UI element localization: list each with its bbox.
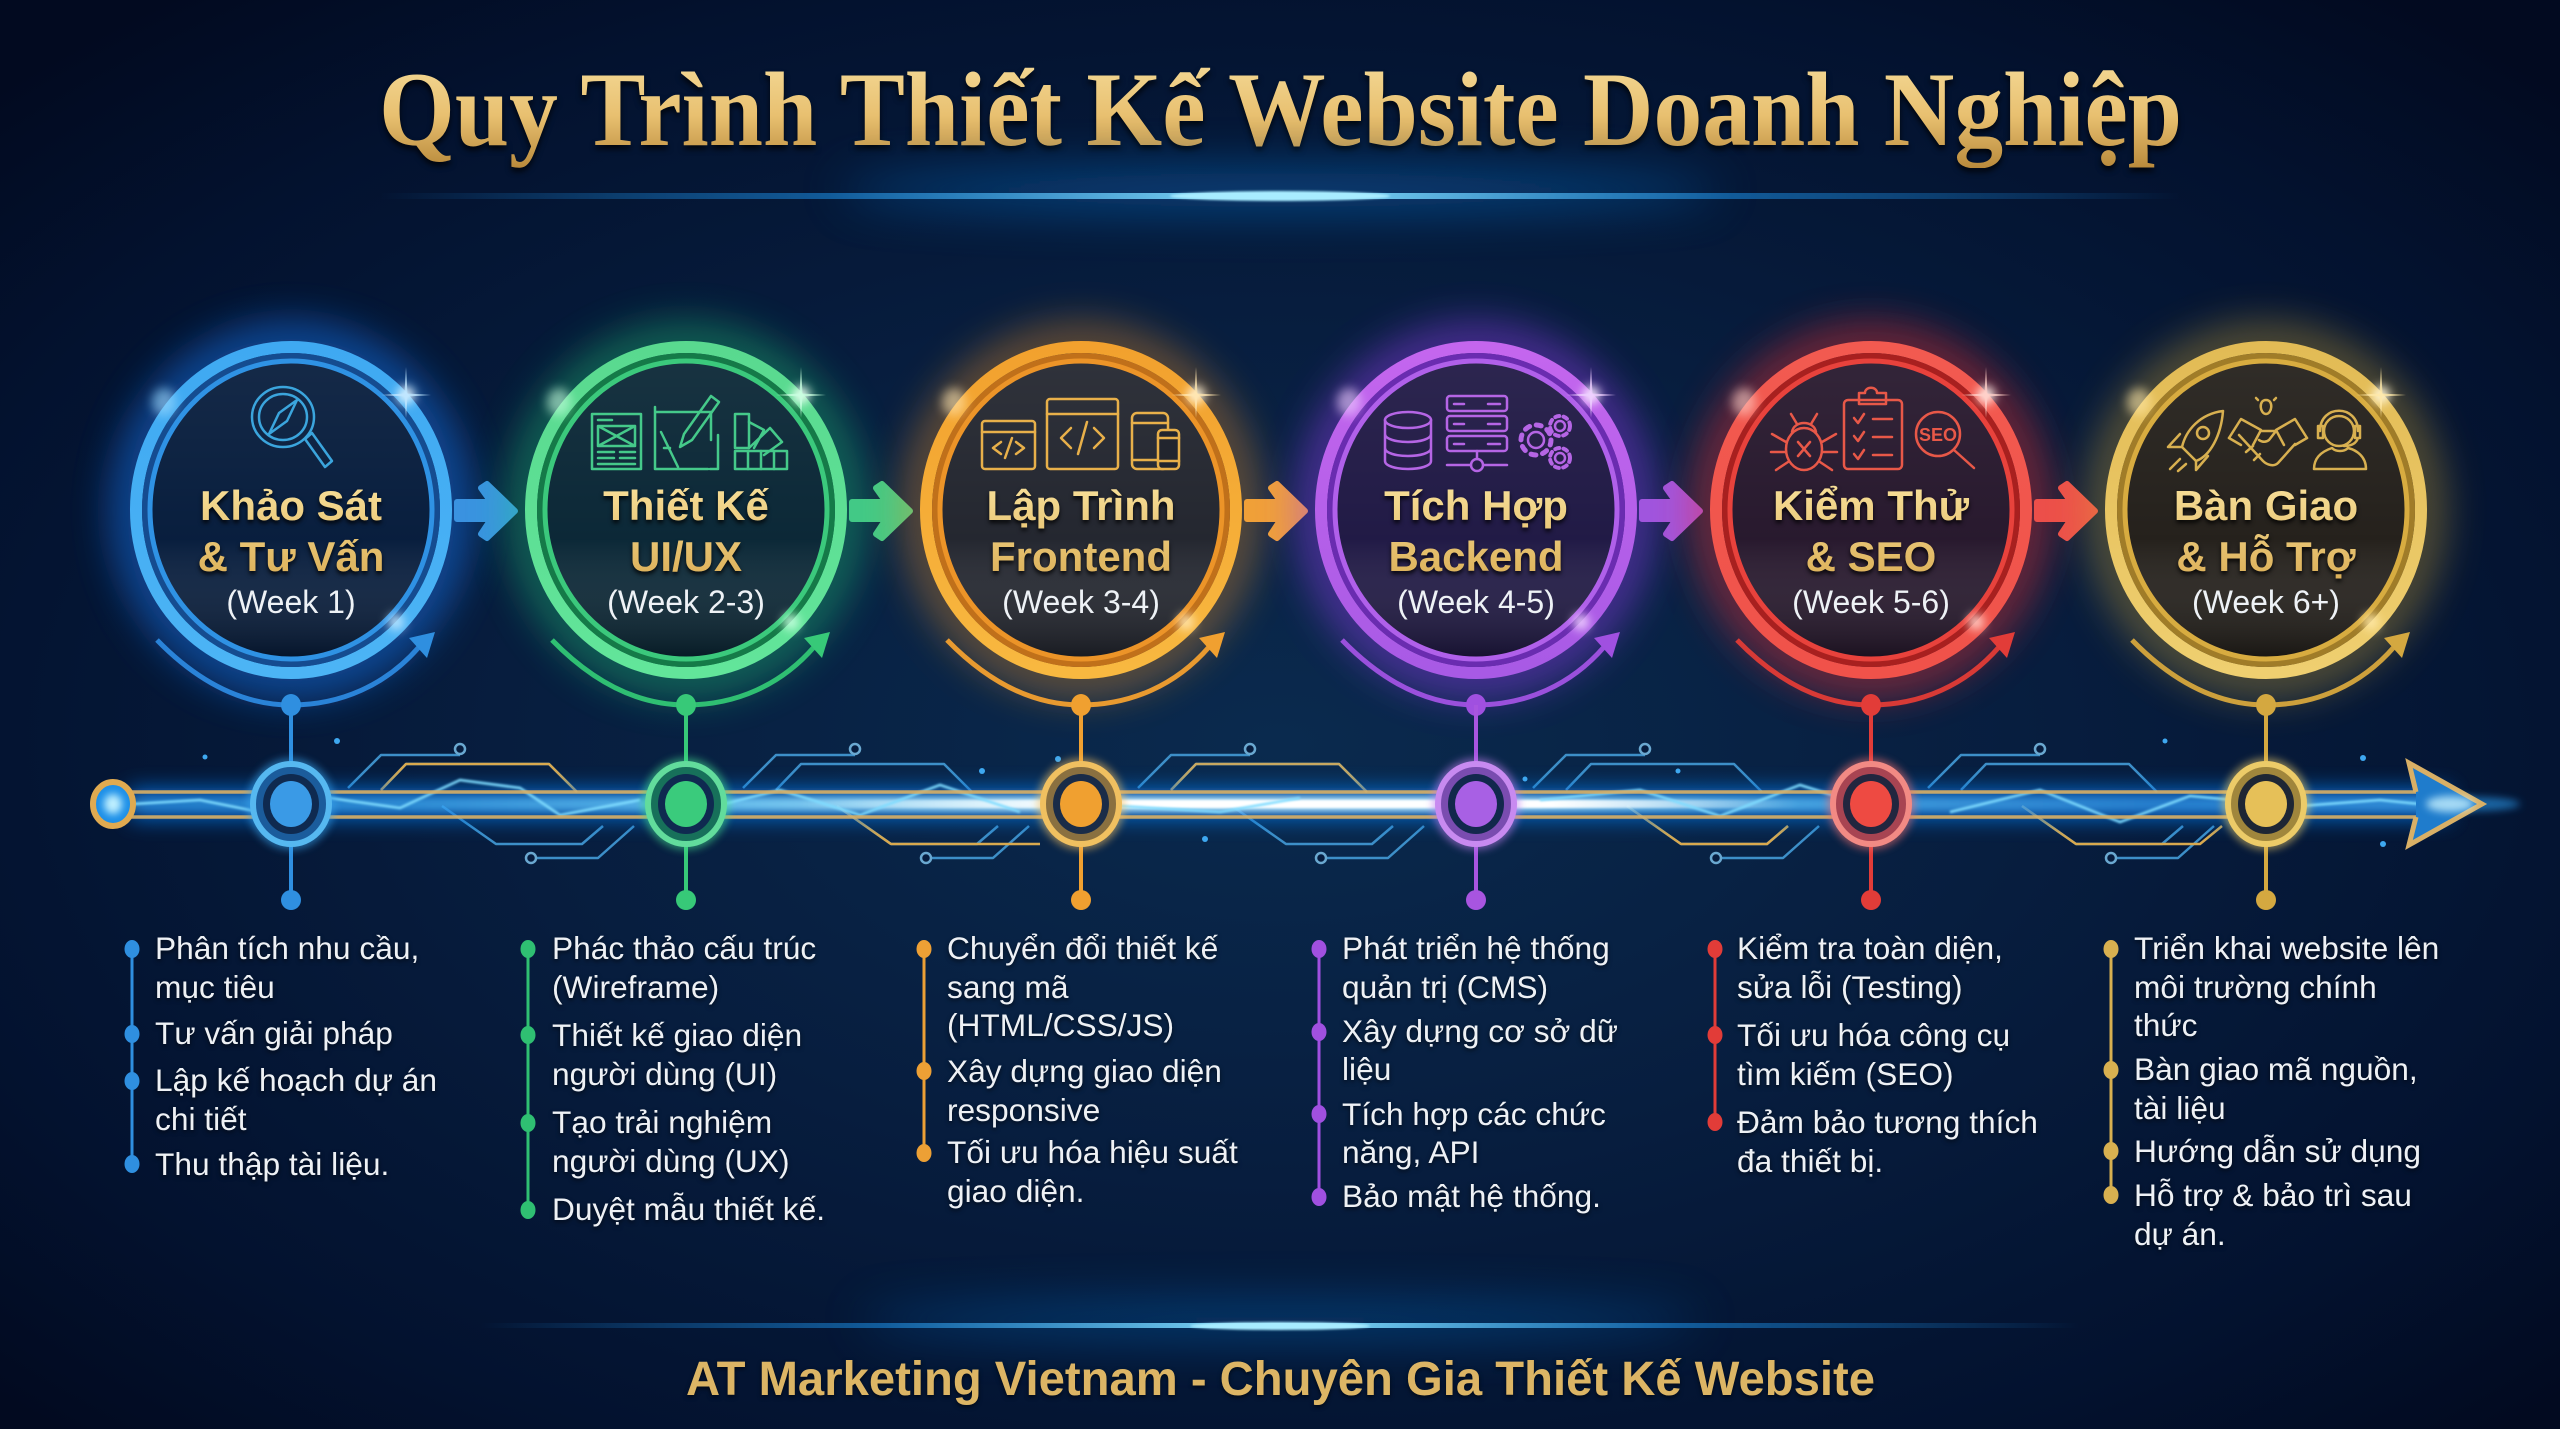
ring (528, 344, 844, 676)
bullet list: Tích Hợp: Tích hợp các chức (1342, 1096, 1606, 1132)
step 3: Lập Trình Frontend (923, 344, 1305, 716)
step title: Kiểm Thử (1773, 482, 1970, 529)
step 6: Bàn Giao & Hỗ Trợ (2108, 344, 2424, 716)
sparks (202, 738, 2386, 847)
bullet list: Lập Trình: giao diện. (947, 1173, 1084, 1209)
ring (1318, 344, 1634, 676)
bullet list: Tích Hợp: Bảo mật hệ thống. (1342, 1178, 1601, 1214)
bullet list: Kiểm Thử: tìm kiếm (SEO) (1737, 1056, 1954, 1092)
orbit arrow (2132, 632, 2410, 716)
node: week 2-3 (642, 705, 730, 910)
ring (133, 344, 449, 676)
bullet list: Bàn Giao: Bàn giao mã nguồn, (2134, 1051, 2418, 1087)
step title: UI/UX (630, 533, 742, 580)
bullet list: Khảo Sát: Lập kế hoạch dự án (155, 1062, 437, 1098)
step 5: Kiểm Thử & SEO (1713, 344, 2095, 716)
bullet list: Kiểm Thử: Tối ưu hóa công cụ (1737, 1017, 2010, 1053)
node: week 4-5 (1432, 705, 1520, 910)
step title: Tích Hợp (1384, 482, 1568, 529)
circuit traces (348, 755, 2222, 858)
bullet list: Tích Hợp: Phát triển hệ thống (1342, 930, 1610, 966)
step title: & Hỗ Trợ (2176, 532, 2356, 580)
bullet list: Tích Hợp: quản trị (CMS) (1342, 969, 1548, 1005)
bullet list: Tích Hợp: liệu (1342, 1051, 1391, 1087)
title glow divider (380, 170, 2180, 210)
bullet list: Lập Trình: sang mã (947, 969, 1069, 1005)
bullet list: Bàn Giao: dự án. (2134, 1216, 2226, 1252)
bullet list: Khảo Sát (124, 930, 437, 1182)
bullet list: Lập Trình: Xây dựng giao diện (947, 1053, 1222, 1089)
bullet list: Thiết Kế: Tạo trải nghiệm (552, 1104, 772, 1140)
bullet list: Thiết Kế: (Wireframe) (552, 969, 719, 1005)
orbit arrow (947, 632, 1225, 716)
bullet list: Lập Trình: Tối ưu hóa hiệu suất (947, 1134, 1238, 1170)
bullet list: Khảo Sát: mục tiêu (155, 969, 275, 1005)
bullet list: Tích Hợp: năng, API (1342, 1134, 1479, 1170)
step title: & Tư Vấn (198, 533, 384, 580)
bullet list: Bàn Giao (2104, 930, 2439, 1252)
icon: wireframe, pencil, swatches (592, 396, 787, 469)
icon: bug, checklist, SEO magnifier (1771, 388, 1974, 470)
bullet list: Khảo Sát: Thu thập tài liệu. (155, 1146, 389, 1182)
footer glow divider (480, 1304, 2080, 1336)
bullet list: Thiết Kế: người dùng (UI) (552, 1056, 777, 1092)
bullet list: Lập Trình (916, 930, 1238, 1209)
bullet list: Tích Hợp: Xây dựng cơ sở dữ (1342, 1013, 1618, 1049)
bullet list: Kiểm Thử: Kiểm tra toàn diện, (1737, 930, 2003, 966)
arrow to next step (1642, 484, 1700, 538)
bullet list: Khảo Sát: chi tiết (155, 1101, 247, 1137)
ring (1713, 344, 2029, 676)
bullet list: Khảo Sát: Tư vấn giải pháp (155, 1015, 393, 1051)
orbit arrow (157, 632, 435, 716)
arrow to next step (2037, 484, 2095, 538)
node: week 5-6 (1827, 705, 1915, 910)
ring (923, 344, 1239, 676)
arrow to next step (1247, 484, 1305, 538)
bullet list: Kiểm Thử: đa thiết bị. (1737, 1143, 1883, 1179)
step title: Bàn Giao (2174, 482, 2358, 529)
orbit arrow (1737, 632, 2015, 716)
week: (Week 3-4) (1002, 584, 1160, 620)
energy beam (130, 780, 2450, 822)
arrow to next step (457, 484, 515, 538)
bullet list: Kiểm Thử: Đảm bảo tương thích (1737, 1104, 2038, 1140)
bullet list: Thiết Kế: Thiết kế giao diện (552, 1017, 802, 1053)
week: (Week 5-6) (1792, 584, 1950, 620)
node: week 6+ (2222, 705, 2310, 910)
timeline (93, 738, 2520, 863)
orbit arrow (552, 632, 830, 716)
bullet list: Kiểm Thử (1708, 930, 2038, 1179)
step 2: Thiết Kế UI/UX (528, 344, 910, 716)
footer text: AT Marketing Vietnam - Chuyên Gia Thiết Kế Website (686, 1353, 1875, 1406)
week: (Week 2-3) (607, 584, 765, 620)
SEO label: SEO (1919, 425, 1957, 445)
bullet list: Bàn Giao: Hướng dẫn sử dụng (2134, 1133, 2421, 1169)
timeline arrow head (2409, 763, 2520, 845)
icon: database, server, gears (1385, 396, 1570, 471)
step title: & SEO (1806, 533, 1936, 580)
title: Quy Trình Thiết Kế Website Doanh Nghiệp (379, 51, 2182, 168)
bullet list: Khảo Sát: Phân tích nhu cầu, (155, 930, 419, 966)
bullet list: Bàn Giao: Triển khai website lên (2134, 930, 2439, 966)
bullet list: Bàn Giao: môi trường chính (2134, 969, 2377, 1005)
orbit arrow (1342, 632, 1620, 716)
node: week 3-4 (1037, 705, 1125, 910)
bullet list: Lập Trình: responsive (947, 1092, 1100, 1128)
ring (2108, 344, 2424, 676)
bullet list: Tích Hợp (1312, 930, 1618, 1214)
step title: Khảo Sát (200, 482, 382, 529)
icon: code windows and devices (982, 399, 1179, 469)
bullet list: Lập Trình: (HTML/CSS/JS) (947, 1007, 1174, 1043)
step title: Lập Trình (986, 482, 1176, 529)
bullet list: Thiết Kế (520, 930, 825, 1227)
week: (Week 4-5) (1397, 584, 1555, 620)
bullet list: Thiết Kế: người dùng (UX) (552, 1143, 790, 1179)
bullet list: Bàn Giao: thức (2134, 1007, 2198, 1043)
step title: Frontend (990, 533, 1172, 580)
week: (Week 6+) (2192, 584, 2340, 620)
bullet list: Bàn Giao: tài liệu (2134, 1090, 2226, 1126)
bullet list: Thiết Kế: Phác thảo cấu trúc (552, 930, 816, 966)
step 1: Khảo Sát & Tư Vấn (133, 344, 515, 716)
icon: compass magnifier (252, 387, 332, 467)
week: (Week 1) (226, 584, 356, 620)
bullet list: Bàn Giao: Hỗ trợ & bảo trì sau (2134, 1177, 2412, 1213)
bullet list: Kiểm Thử: sửa lỗi (Testing) (1737, 969, 1962, 1005)
bullet list: Thiết Kế: Duyệt mẫu thiết kế. (552, 1191, 825, 1227)
gold rails (130, 792, 2416, 817)
bullet list: Lập Trình: Chuyển đổi thiết kế (947, 930, 1219, 966)
timeline nodes and connectors (247, 705, 2310, 910)
timeline start cap (93, 782, 133, 826)
node: week 1 (247, 705, 335, 910)
icon: rocket, handshake, support agent (2168, 398, 2366, 471)
step title: Backend (1388, 533, 1564, 580)
step title: Thiết Kế (603, 482, 769, 529)
step 4: Tích Hợp Backend (1318, 344, 1700, 716)
arrow to next step (852, 484, 910, 538)
